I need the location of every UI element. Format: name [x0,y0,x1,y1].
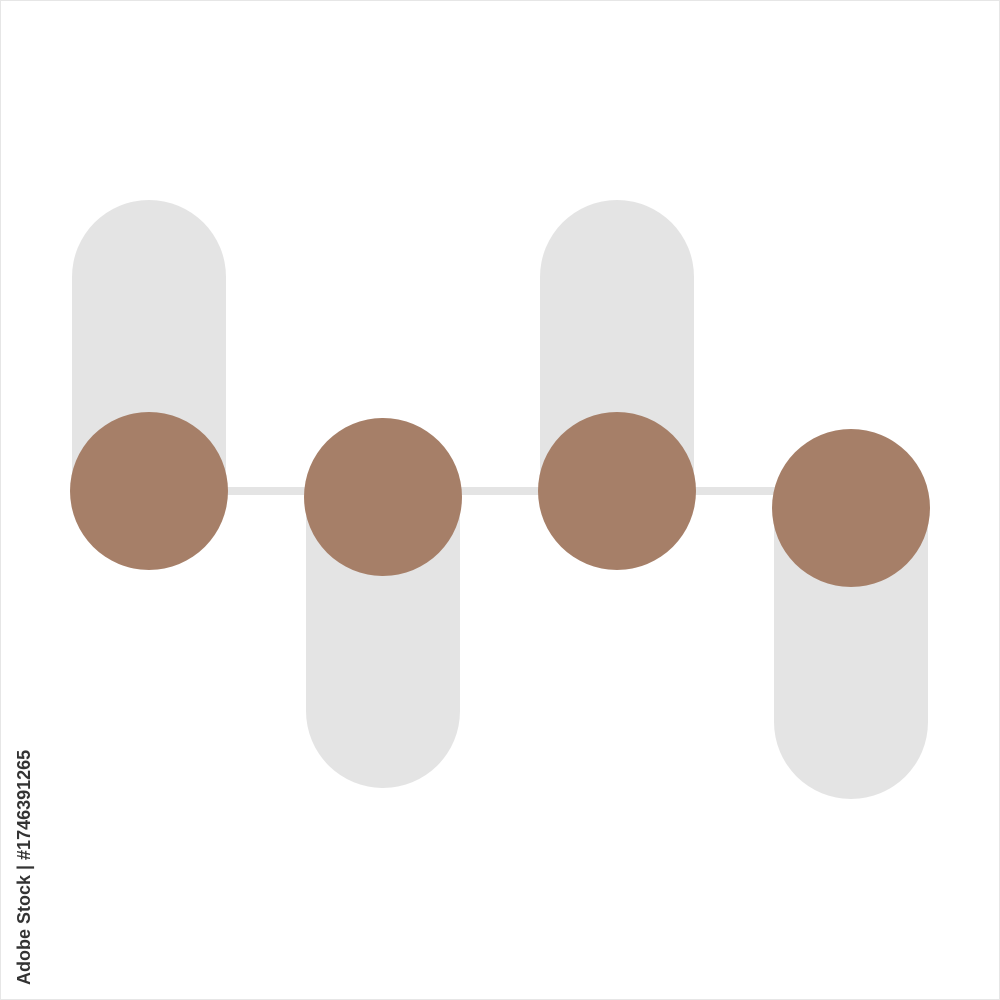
step 1 [70,200,228,570]
step 4 [772,429,930,799]
circle 3 [538,412,696,570]
pill 4 [774,431,928,799]
circle 2 [304,418,462,576]
step 3 [538,200,696,570]
circle 4 [772,429,930,587]
step 2 [304,418,462,788]
pill 2 [306,420,460,788]
circle 1 [70,412,228,570]
pill 1 [72,200,226,568]
pill 3 [540,200,694,568]
watermark credit text: Adobe Stock | #1746391265 [14,750,34,985]
connector line [220,487,780,495]
